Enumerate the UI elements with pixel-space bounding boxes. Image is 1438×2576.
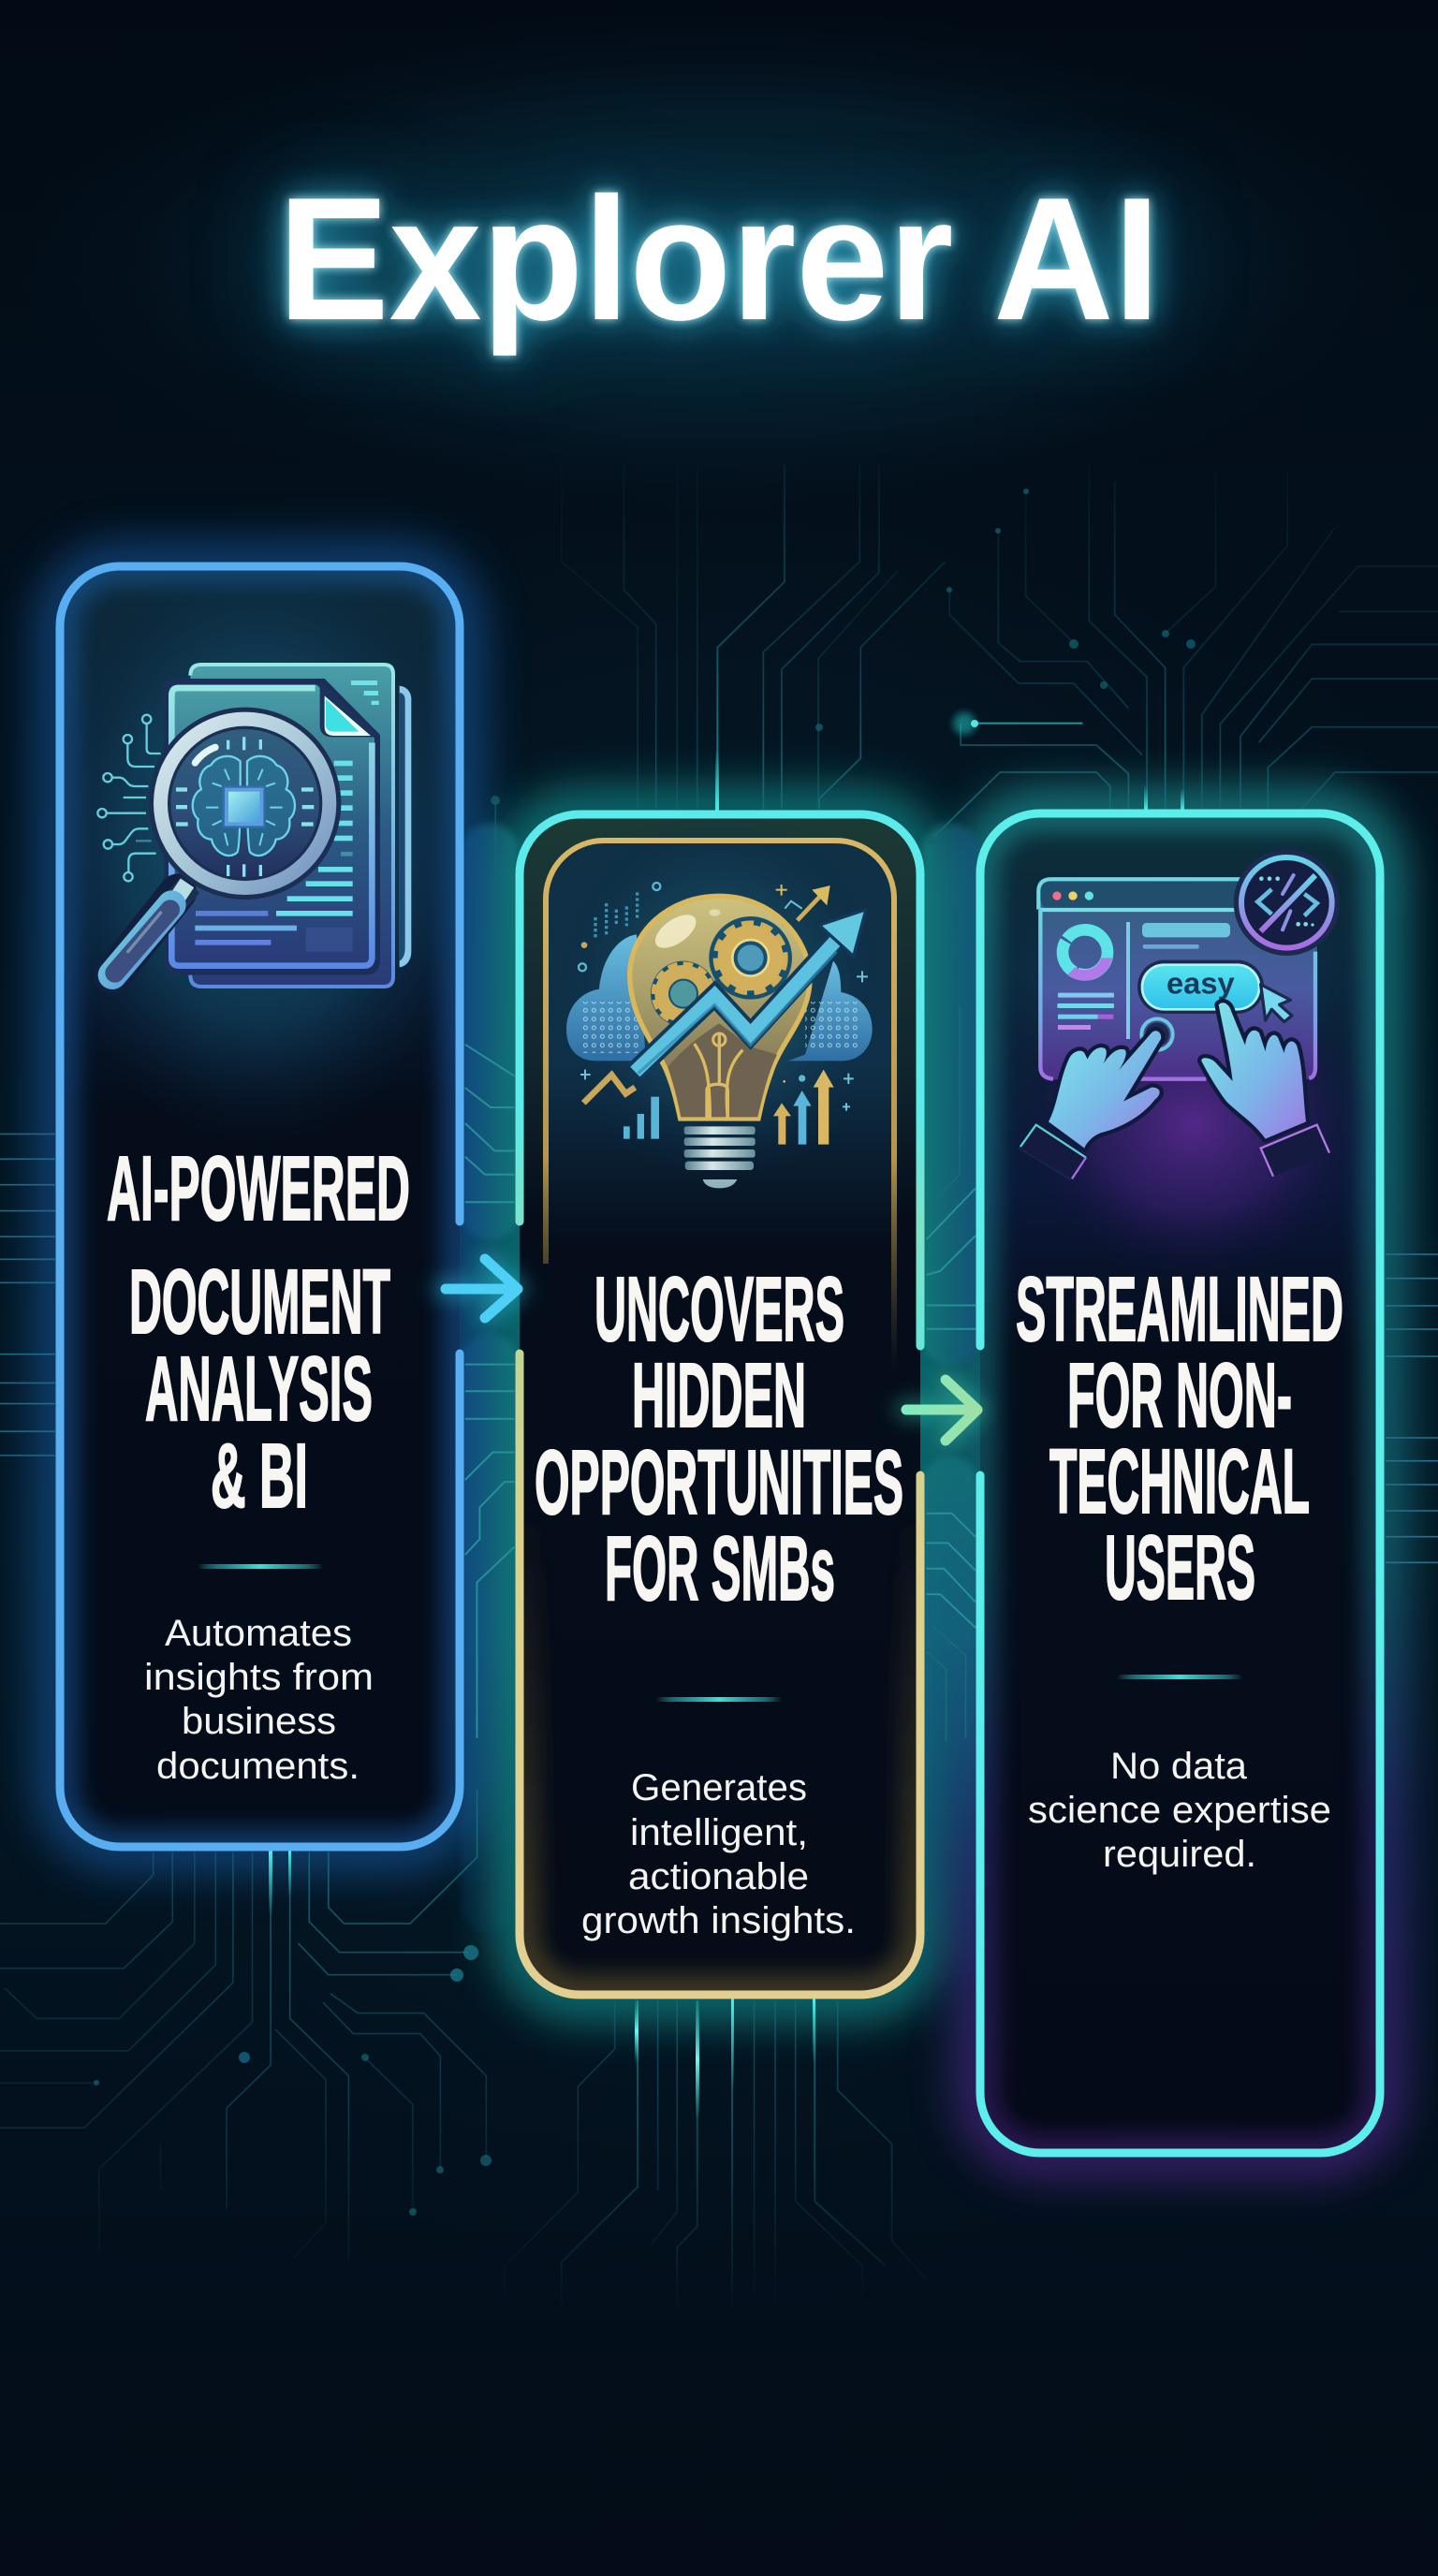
description card 1 [144, 1613, 374, 1787]
heading: uncovers hidden opportunities for SMBs: HIDDEN [632, 1344, 806, 1446]
card 2 body [520, 805, 920, 1995]
description card 1: business [182, 1701, 336, 1742]
description card 3: No data [1110, 1746, 1248, 1787]
card 1 body [35, 543, 484, 1847]
icon: easy dashboard with pointing hands: easy [1167, 967, 1235, 1001]
description card 1: Automates [165, 1613, 352, 1654]
heading: AI-powered document analysis and BI: DOCUMENT [129, 1251, 390, 1353]
side strips between cards [461, 821, 978, 1927]
circuit traces: side edges and strips [0, 724, 1438, 1741]
circuit nodes and light sparks [94, 489, 1196, 2216]
panel: card 1 document analysis [35, 543, 484, 1847]
heading: uncovers hidden opportunities for SMBs [535, 1258, 903, 1619]
description card 1: insights from [144, 1657, 374, 1698]
description card 3: science expertise [1028, 1790, 1331, 1831]
description card 1: documents. [156, 1746, 360, 1787]
arrow: card 1 to card 2 [442, 1259, 518, 1318]
icon: light bulb with gears and growth arrow [566, 883, 873, 1188]
circuit traces: bottom [0, 1789, 927, 2340]
panel: card 3 non-technical users [974, 813, 1380, 2153]
description card 2: actionable [628, 1856, 809, 1897]
description card 3 [1028, 1746, 1331, 1875]
heading: uncovers hidden opportunities for SMBs: UNCOVERS [594, 1258, 844, 1360]
heading: AI-powered document analysis and BI [107, 1137, 410, 1527]
description card 2: Generates [631, 1767, 807, 1808]
description card 2: intelligent, [630, 1812, 808, 1853]
heading: streamlined for non-technical users: USERS [1105, 1516, 1255, 1618]
title: Explorer AI [278, 161, 1160, 357]
heading: AI-powered document analysis and BI: ANALYSIS [145, 1338, 373, 1440]
circuit traces: top [494, 465, 1438, 837]
heading: AI-powered document analysis and BI: AI-POWERED [107, 1137, 410, 1239]
divider card 3 [1117, 1675, 1242, 1679]
panel: card 2 hidden opportunities: OPPORTUNITIES [535, 1431, 903, 1533]
description card 3: required. [1103, 1834, 1256, 1875]
description card 2: growth insights. [581, 1900, 856, 1941]
icon: easy dashboard with pointing hands [1019, 850, 1340, 1179]
heading: uncovers hidden opportunities for SMBs: FOR SMBs [605, 1517, 835, 1619]
divider card 2 [656, 1697, 782, 1702]
icon: magnifier over brain document [97, 665, 411, 987]
description card 2 [581, 1767, 856, 1941]
card glows [60, 566, 1380, 2153]
panel: card 2 hidden opportunities [520, 805, 920, 1995]
card 3 body [974, 813, 1380, 2153]
heading: AI-powered document analysis and BI: & BI [211, 1425, 308, 1527]
divider card 1 [198, 1564, 323, 1569]
heading: streamlined for non-technical users [1016, 1258, 1343, 1618]
arrow: card 2 to card 3 [904, 1380, 977, 1441]
